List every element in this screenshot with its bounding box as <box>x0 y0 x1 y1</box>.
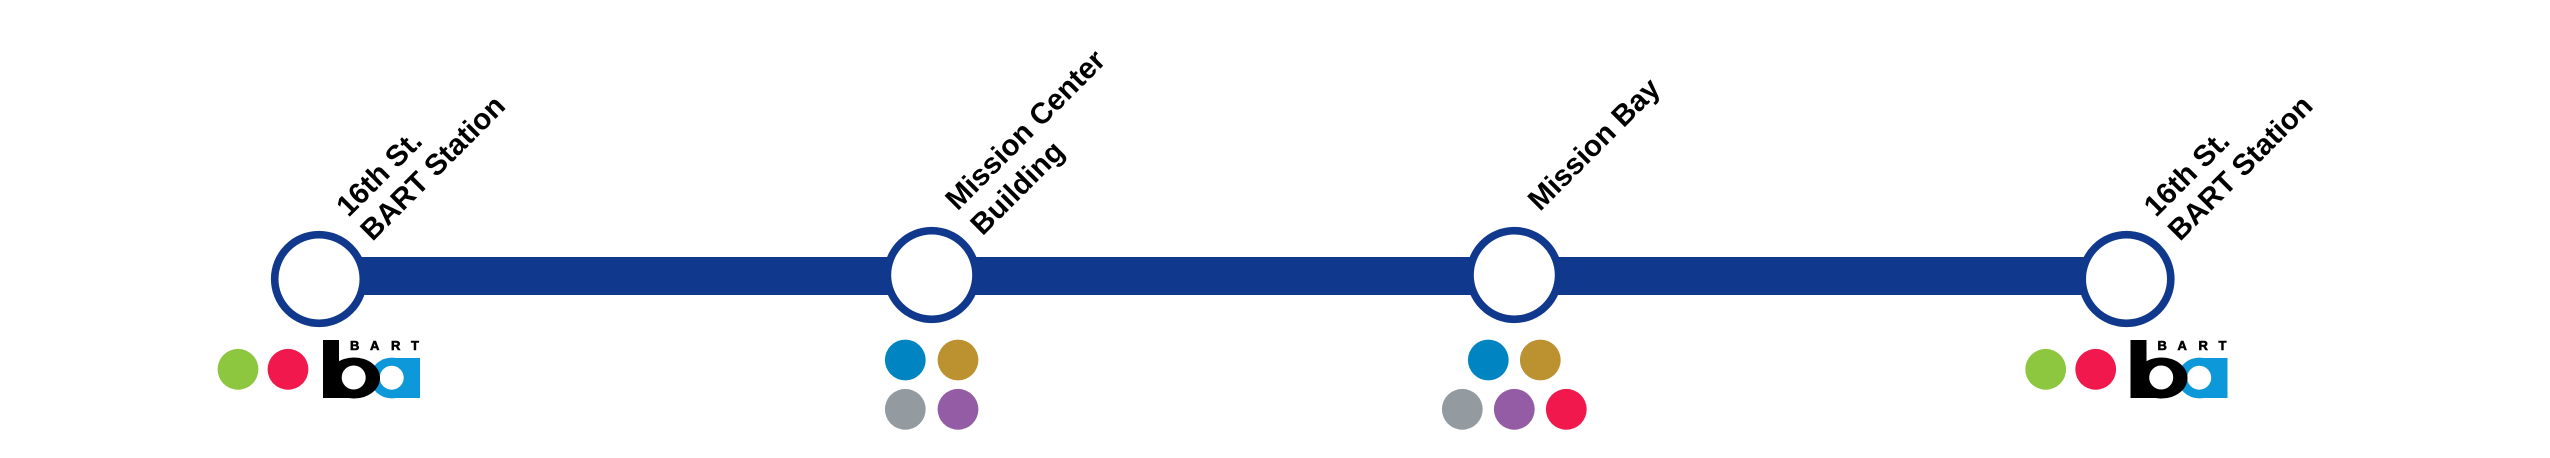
icon: BART logo: BART <box>350 338 419 353</box>
stop: 16th St. BART Station (start) <box>218 89 512 399</box>
icon: BART logo <box>2130 338 2228 398</box>
stop marker <box>1470 231 1559 319</box>
stop marker <box>887 231 976 319</box>
icon: BART logo <box>323 338 420 398</box>
line dots <box>218 349 308 390</box>
stop label: Building <box>964 135 1071 241</box>
stop: Mission Bay <box>1442 71 1667 430</box>
stop label: BART Station <box>2162 89 2319 247</box>
stop: 16th St. BART Station (end) <box>2025 89 2319 399</box>
line dots <box>2025 349 2116 390</box>
line dots <box>1442 340 1587 430</box>
stop: Mission Center Building <box>885 43 1112 430</box>
stop label: BART Station <box>354 89 512 247</box>
stop label: Mission Bay <box>1522 71 1667 217</box>
route line <box>319 257 2127 295</box>
stop label: Mission Center <box>939 43 1112 216</box>
stop label: 16th St. <box>2138 124 2236 223</box>
stop marker <box>275 235 363 323</box>
stop marker <box>2082 235 2171 323</box>
stop label: 16th St. <box>330 124 429 223</box>
icon: BART logo: BART <box>2158 338 2226 353</box>
line dots <box>885 340 978 430</box>
